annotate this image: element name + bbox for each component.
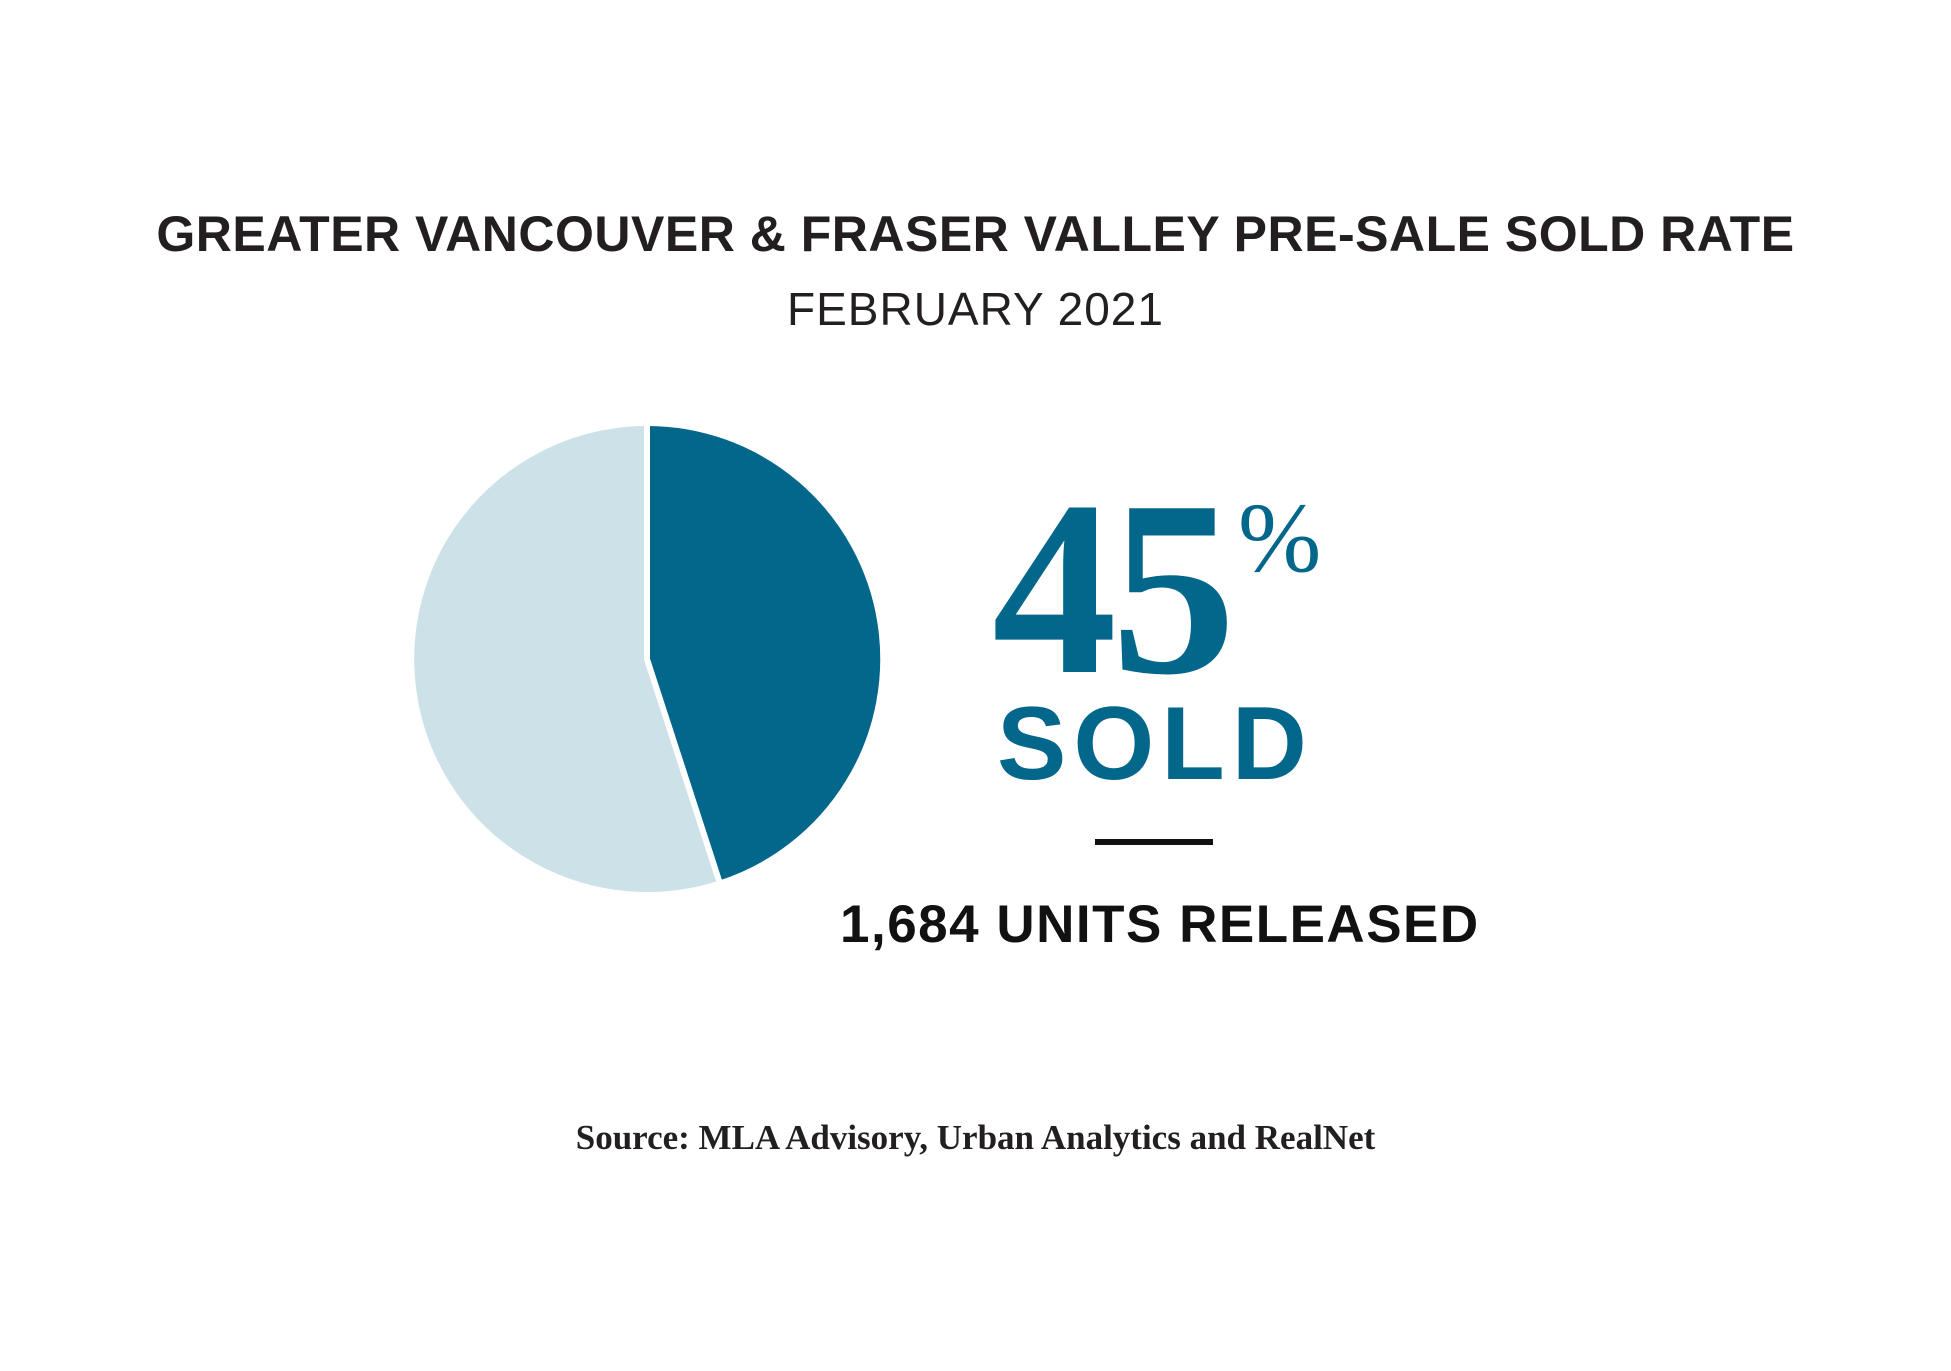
source: Source: MLA Advisory, Urban Analytics and RealNet	[576, 1118, 1375, 1157]
pie slice: unsold	[411, 423, 720, 895]
subtitle: FEBRUARY 2021	[787, 283, 1164, 335]
title: GREATER VANCOUVER & FRASER VALLEY PRE-SALE SOLD RATE	[156, 206, 1795, 262]
units released: 1,684 UNITS RELEASED	[840, 895, 1480, 954]
pie slice: sold 45%	[647, 423, 883, 884]
big percentage: %	[1238, 482, 1321, 593]
big percentage: 45	[992, 450, 1230, 727]
divider line	[1095, 839, 1213, 845]
sold label: SOLD	[997, 686, 1314, 802]
